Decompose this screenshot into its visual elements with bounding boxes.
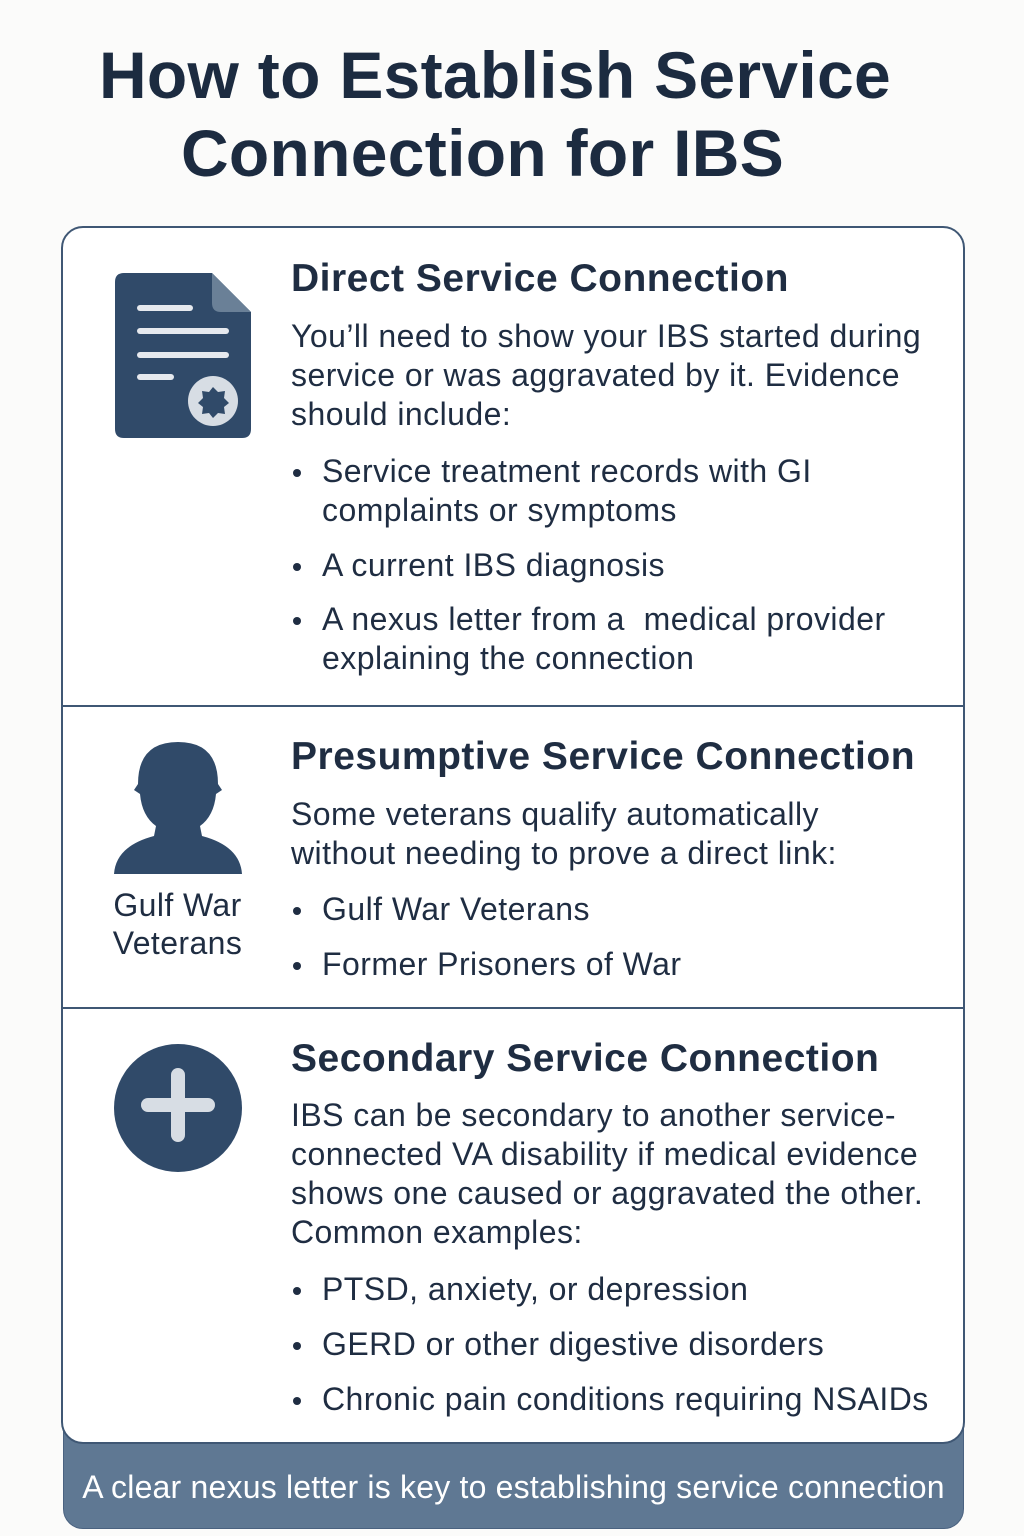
title: How to Establish Service	[99, 38, 891, 112]
text: direct intro: should include:	[291, 396, 511, 432]
heading: secondary: Secondary Service Connection	[291, 1037, 879, 1080]
text: secondary intro	[291, 1097, 923, 1250]
list: secondary: PTSD, anxiety, or depression	[322, 1271, 748, 1307]
list: presumptive	[293, 891, 681, 982]
list: direct evidence: complaints or symptoms	[322, 492, 677, 528]
heading: presumptive: Presumptive Service Connection	[291, 735, 915, 778]
text: secondary intro: shows one caused or aggravated the other.	[291, 1175, 923, 1211]
panel: presumptive icon: Gulf War	[113, 887, 242, 923]
title	[99, 38, 891, 190]
text: direct intro	[291, 318, 921, 432]
list: presumptive: Former Prisoners of War	[322, 946, 681, 982]
text: presumptive intro: Some veterans qualify automatically	[291, 796, 819, 832]
list: direct evidence	[293, 453, 886, 676]
text: presumptive intro	[291, 796, 837, 871]
text: secondary intro: connected VA disability if medical evidence	[291, 1136, 918, 1172]
main card	[61, 226, 965, 1444]
text: secondary intro: Common examples:	[291, 1214, 583, 1250]
icon: document	[115, 273, 251, 438]
list: direct evidence: A nexus letter from a medical provider	[322, 601, 886, 637]
list: direct evidence: Service treatment records with GI	[322, 453, 812, 489]
panel: direct	[115, 273, 251, 438]
list: secondary	[293, 1271, 929, 1417]
icon: plus circle	[114, 1044, 242, 1172]
text: direct intro: service or was aggravated by it. Evidence	[291, 357, 900, 393]
list: direct evidence: explaining the connection	[322, 640, 694, 676]
panel: presumptive icon: Veterans	[113, 925, 242, 961]
text: presumptive intro: without needing to prove a direct link:	[291, 835, 837, 871]
footer banner: A clear nexus letter is key to establishing service connection	[82, 1469, 945, 1505]
text: direct intro: You’ll need to show your IBS started during	[291, 318, 921, 354]
panel: presumptive icon	[112, 742, 242, 961]
title: Connection for IBS	[181, 116, 784, 190]
list: secondary: GERD or other digestive disorders	[322, 1326, 824, 1362]
heading: direct: Direct Service Connection	[291, 257, 789, 300]
footer banner	[63, 1400, 964, 1529]
list: secondary: Chronic pain conditions requiring NSAIDs	[322, 1381, 929, 1417]
list: direct evidence: A current IBS diagnosis	[322, 547, 665, 583]
list: presumptive: Gulf War Veterans	[322, 891, 590, 927]
text: secondary intro: IBS can be secondary to another service-	[291, 1097, 896, 1133]
